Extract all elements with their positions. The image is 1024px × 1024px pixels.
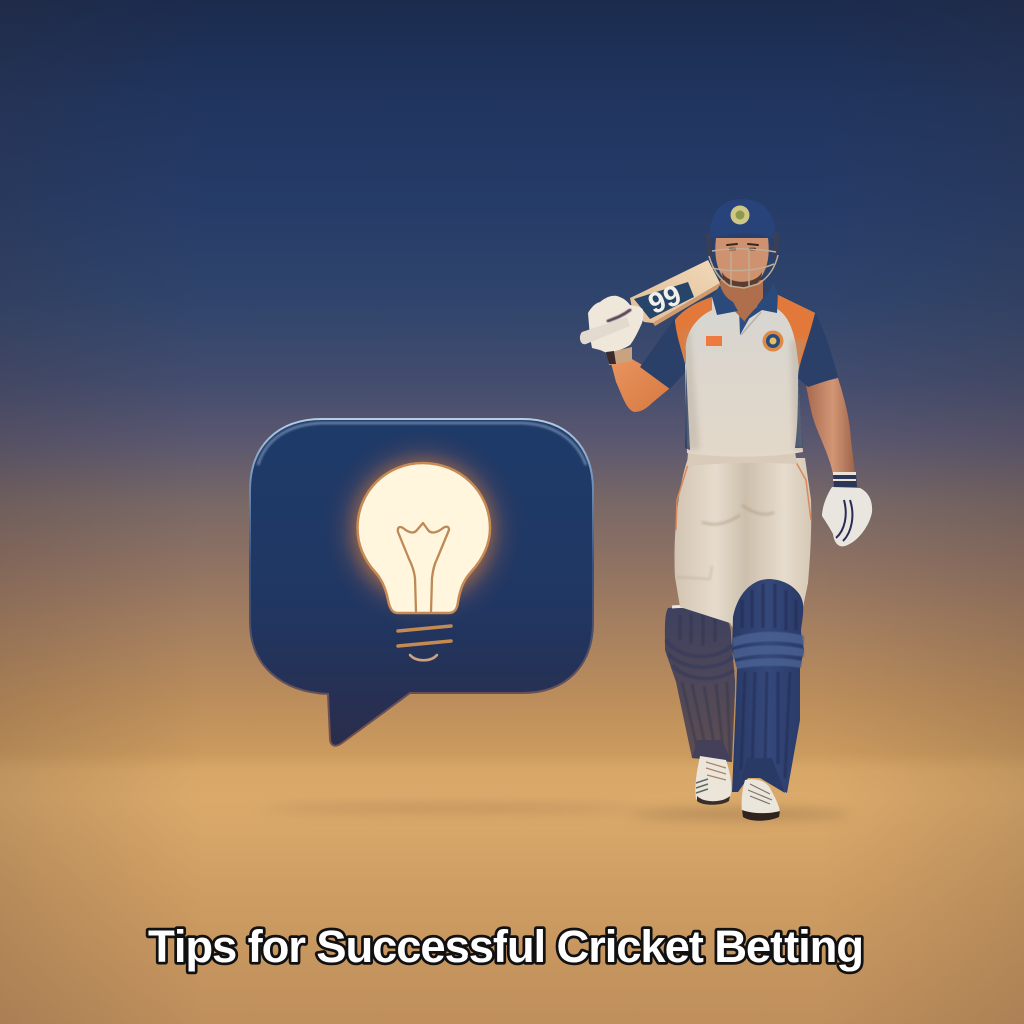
title: Tips for Successful Cricket Betting (148, 921, 864, 972)
left orange shoulder panel (675, 297, 712, 365)
chest flag (706, 336, 722, 346)
floor shadow (260, 804, 850, 819)
side panels (685, 366, 803, 450)
left arm (611, 359, 670, 412)
helmet badge (730, 206, 750, 224)
shirt shading (684, 330, 810, 450)
bulb glow (320, 427, 526, 633)
collar (712, 283, 778, 322)
helmet side clips (706, 232, 779, 258)
speech bubble with light bulb icon (250, 419, 593, 746)
trousers (675, 452, 811, 630)
bulb filament (398, 523, 449, 612)
right arm (806, 378, 855, 474)
neck (720, 280, 763, 322)
placket (739, 309, 749, 335)
bat handle (580, 317, 630, 344)
front shoe (742, 779, 780, 821)
shirt body (675, 295, 815, 457)
bulb base lines (398, 626, 451, 646)
front leg pad (732, 579, 804, 793)
left sleeve (640, 318, 689, 389)
bubble top highlight (258, 423, 586, 465)
bulb glass (358, 463, 490, 613)
right sleeve (798, 313, 838, 387)
face guard (709, 249, 778, 288)
back leg pad (665, 607, 735, 762)
right glove (822, 472, 872, 546)
icon: light bulb (358, 463, 490, 660)
bulb base cap (410, 655, 437, 660)
head (706, 199, 779, 288)
wrist band (606, 347, 632, 365)
chest badge (762, 330, 784, 352)
back shoe (695, 756, 731, 805)
cricket player (580, 199, 872, 821)
bubble body (250, 419, 593, 746)
left glove (580, 296, 643, 353)
cricket bat (630, 260, 721, 326)
helmet dome (708, 199, 777, 240)
beard (722, 272, 762, 288)
eyes (727, 244, 758, 245)
right orange shoulder panel (776, 295, 815, 368)
face (715, 238, 769, 286)
bat label with number: 99 (644, 279, 686, 321)
